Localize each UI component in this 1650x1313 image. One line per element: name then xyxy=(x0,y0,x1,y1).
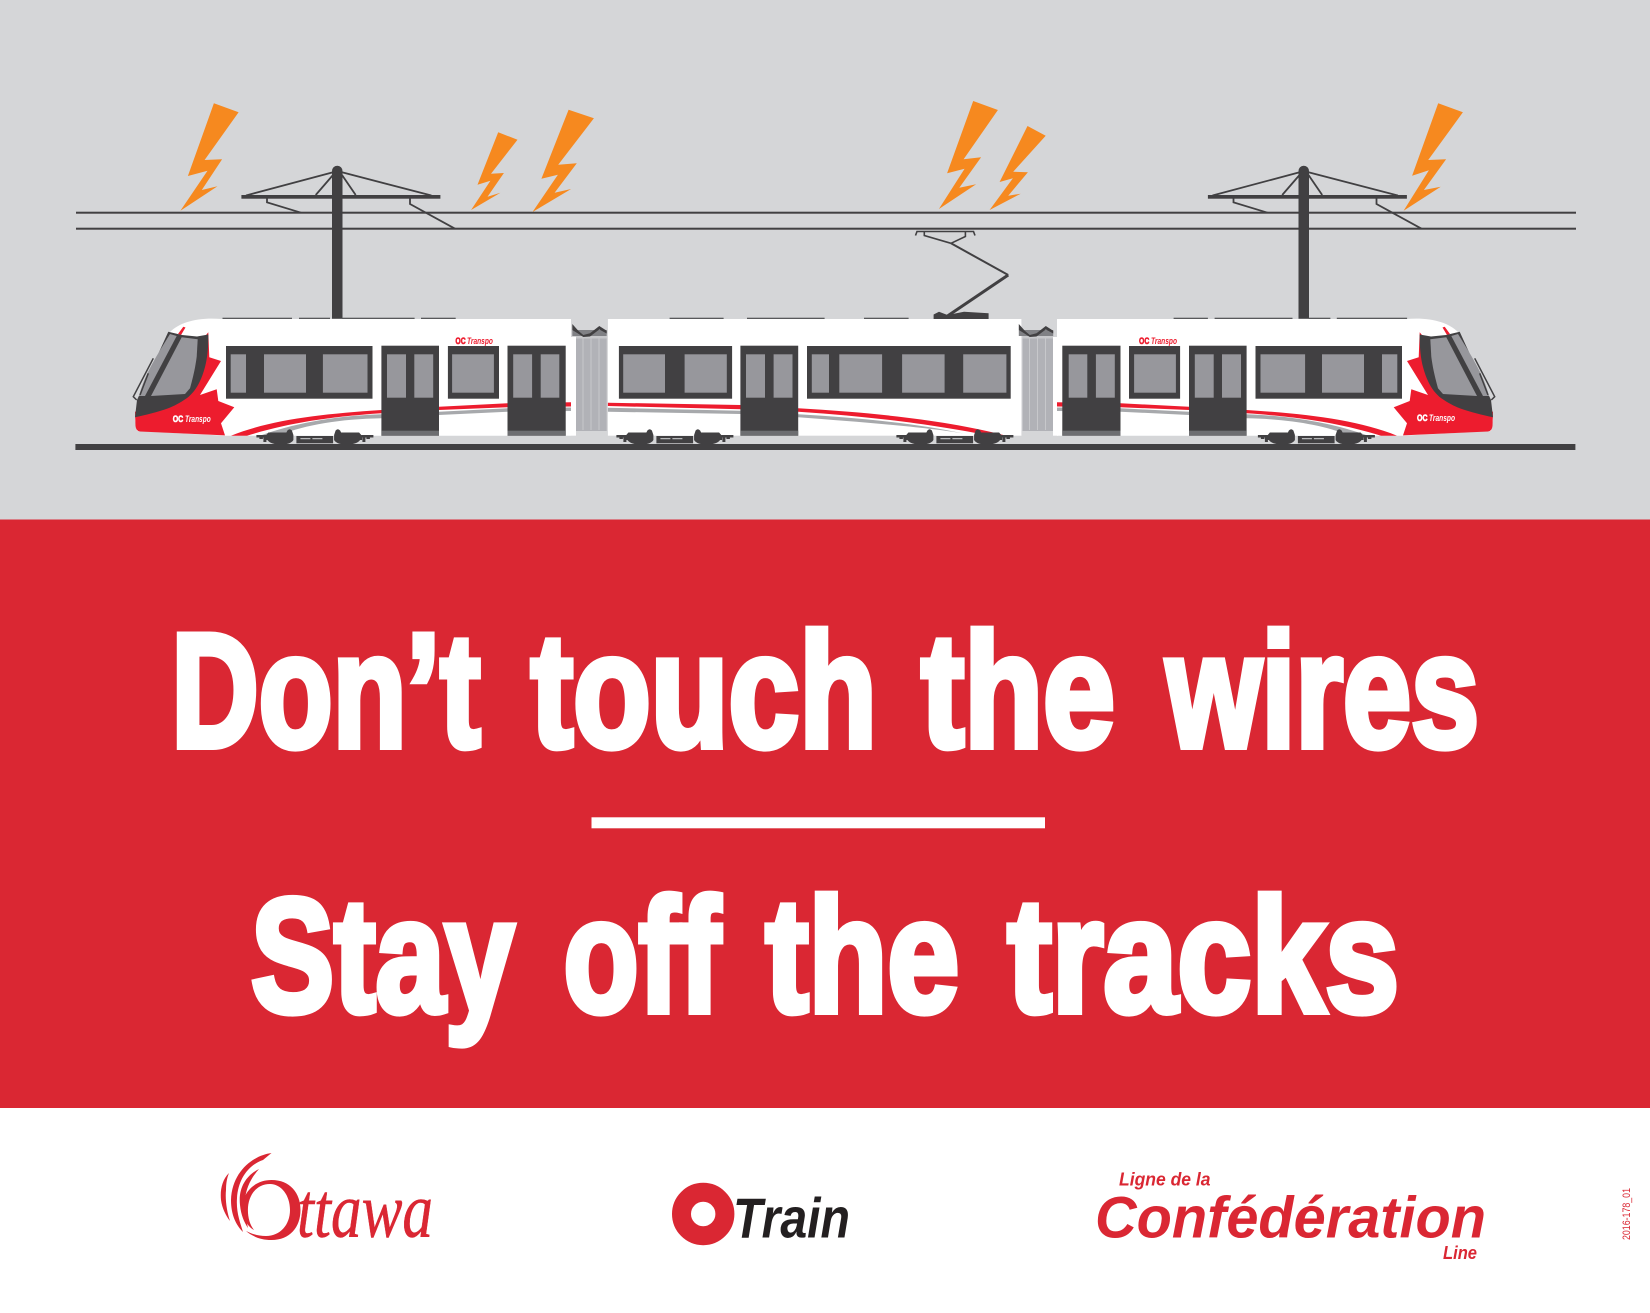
logo mark: feather arcs xyxy=(221,1153,272,1232)
logo mark: letter O ring xyxy=(242,1180,300,1240)
logo mark: red ring xyxy=(682,1192,725,1236)
logo: OC Transpo on right nose: OC xyxy=(1417,413,1428,424)
logo: OC Transpo on left car: Transpo xyxy=(467,336,493,347)
heading: stay off the tracks: off xyxy=(564,866,721,1046)
track xyxy=(75,444,1575,450)
icon: left catenary mast xyxy=(241,166,455,319)
logo: OC Transpo on left nose xyxy=(173,414,211,425)
logo: OC Transpo on left car xyxy=(455,336,493,347)
logo: OC Transpo on right car: Transpo xyxy=(1151,336,1177,347)
logo wordmark: Train xyxy=(733,1187,850,1250)
logo: City of Ottawa xyxy=(221,1153,433,1254)
pantograph xyxy=(916,232,1008,319)
icon: right catenary mast xyxy=(1208,166,1422,319)
logo: OC Transpo on left car: OC xyxy=(455,336,466,347)
icon: lightning bolts xyxy=(180,101,1463,212)
heading: don't touch the wires: wires xyxy=(1166,600,1479,782)
logo: OC Transpo on left nose: OC xyxy=(173,414,183,425)
panel: grey illustration background xyxy=(0,0,1650,520)
heading: stay off the tracks: Stay xyxy=(251,866,514,1046)
panel: red message band xyxy=(0,520,1650,1108)
heading: don't touch the wires xyxy=(171,600,1479,782)
heading: stay off the tracks: tracks xyxy=(1008,866,1399,1046)
heading: don't touch the wires: touch xyxy=(531,600,877,782)
logo text: Confédération: Confédération xyxy=(1095,1185,1486,1250)
train bogies xyxy=(256,429,1375,444)
train: left articulation xyxy=(571,324,607,436)
logo text: Line: Line xyxy=(1443,1243,1477,1263)
heading: stay off the tracks: the xyxy=(766,866,959,1046)
logo: OC Transpo on right nose: Transpo xyxy=(1429,413,1455,424)
logo: OC Transpo on left nose: Transpo xyxy=(185,414,211,425)
logo: OC Transpo on right car xyxy=(1139,336,1177,347)
train: left car with nose xyxy=(133,319,571,436)
train: right car with nose xyxy=(1057,319,1495,436)
heading: don't touch the wires: Don’t xyxy=(171,600,481,782)
overhead wires xyxy=(76,212,1576,230)
train: right articulation xyxy=(1019,324,1058,436)
logo: OC Transpo on right nose xyxy=(1417,413,1455,424)
divider xyxy=(592,817,1045,828)
train: middle car xyxy=(608,319,1021,436)
roof details xyxy=(222,318,1407,319)
print code: 2016-178_01 xyxy=(1621,1188,1633,1240)
logo: O-Train xyxy=(682,1187,850,1250)
logo text: Ligne de la: Ligne de la xyxy=(1119,1170,1210,1190)
logo: OC Transpo on right car: OC xyxy=(1139,336,1149,347)
panel: white footer xyxy=(0,1108,1650,1313)
logo wordmark: ttawa xyxy=(297,1167,433,1254)
heading: stay off the tracks xyxy=(251,866,1399,1046)
heading: don't touch the wires: the xyxy=(921,600,1115,782)
logo: Confederation Line xyxy=(1095,1170,1486,1263)
